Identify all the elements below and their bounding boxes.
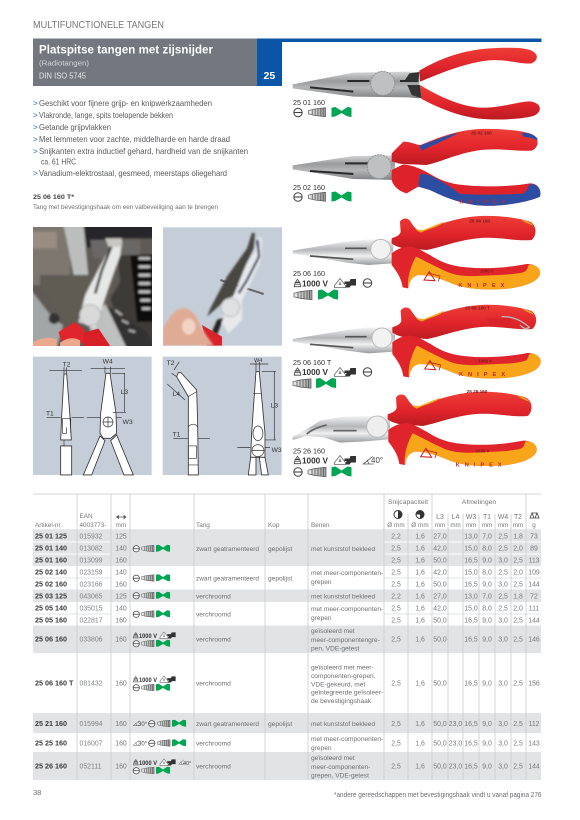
table rows: article, EAN, length and numeric values: 2,5 xyxy=(513,582,523,588)
table header: mm xyxy=(498,522,508,529)
table rows: article, EAN, length and numeric values: 25 01 140 xyxy=(35,544,67,552)
table row shading xyxy=(33,530,541,780)
table rows: article, EAN, length and numeric values: 50,0 xyxy=(433,740,447,748)
table rows: article, EAN, length and numeric values: 1,6 xyxy=(415,594,425,600)
table text: Benen: geïsoleerd met xyxy=(311,755,355,762)
label and icons: 25 06 160 T: 25 06 160 T xyxy=(293,358,332,367)
table rows: article, EAN, length and numeric values: 25 02 160 xyxy=(35,580,67,588)
table rows: article, EAN, length and numeric values: 160 xyxy=(115,558,127,564)
plier: 25 02 160: KNIPEX xyxy=(459,199,510,205)
diagram: straight plier dimensions: W4 xyxy=(103,359,113,366)
table rows: article, EAN, length and numeric values: 2,5 xyxy=(391,636,401,644)
table rows: article, EAN, length and numeric values: 2,0 xyxy=(513,606,523,612)
diagram: straight plier dimensions xyxy=(33,357,152,475)
table text: Benen: geïsoleerd met xyxy=(311,628,355,635)
table rows: article, EAN, length and numeric values: 9,0 xyxy=(482,636,492,644)
table rows: article, EAN, length and numeric values: 72 xyxy=(530,594,538,600)
table icons column: 1000 V xyxy=(139,761,157,767)
table rows: article, EAN, length and numeric values: 143 xyxy=(528,740,540,748)
table rows: article, EAN, length and numeric values: 2,5 xyxy=(498,570,508,576)
table rows: article, EAN, length and numeric values: 022817 xyxy=(80,618,103,624)
table text: Benen: grepen, VDE-getest xyxy=(311,772,369,780)
table text: Tang: zwart geatramenteerd xyxy=(196,721,259,728)
table icons column: 30° xyxy=(138,742,148,748)
plier: 25 06 160: 25 06 160 xyxy=(469,219,490,224)
plier: 25 06 160 xyxy=(293,216,540,289)
table rows: article, EAN, length and numeric values: 023166 xyxy=(80,582,103,588)
table header: Artikel-nr. xyxy=(35,522,62,529)
table rows: article, EAN, length and numeric values: 160 xyxy=(115,582,127,588)
table header: W3 xyxy=(466,514,476,521)
title: Platspitse tangen met zijsnijder xyxy=(39,44,214,56)
table rows: article, EAN, length and numeric values: 111 xyxy=(529,606,539,612)
label and icons: 25 06 160 T xyxy=(293,358,372,388)
label and icons: 25 26 160: 25 26 160 xyxy=(293,446,325,456)
table rows: article, EAN, length and numeric values: 140 xyxy=(115,606,127,612)
table rows: article, EAN, length and numeric values: 1,6 xyxy=(415,558,425,564)
diagram: straight plier dimensions: L3 xyxy=(121,389,128,396)
photo: bent pliers holding wire xyxy=(163,227,282,346)
table rows: article, EAN, length and numeric values: 2,5 xyxy=(498,546,508,552)
table rows: article, EAN, length and numeric values: 9,0 xyxy=(482,558,492,564)
diagram: bent plier dimensions: L4 xyxy=(173,391,180,398)
feature list: Getande grijpvlakken xyxy=(39,123,111,132)
table text: Benen: met meer-componenten- xyxy=(311,736,383,743)
table rows: article, EAN, length and numeric values: 125 xyxy=(115,594,127,600)
table header: mm xyxy=(482,522,492,529)
table text: Tang: zwart geatramenteerd xyxy=(196,546,259,553)
table rows: article, EAN, length and numeric values: 16,5 xyxy=(464,764,478,770)
table rows: article, EAN, length and numeric values: 156 xyxy=(528,680,540,688)
feature list: ca. 61 HRC xyxy=(41,158,76,166)
table rows: article, EAN, length and numeric values: 23,0 xyxy=(449,764,462,770)
table rows: article, EAN, length and numeric values: 2,0 xyxy=(513,546,523,552)
table rows: article, EAN, length and numeric values: 50,0 xyxy=(433,636,447,644)
table rows: article, EAN, length and numeric values: 1,6 xyxy=(415,570,425,576)
table header: Benen xyxy=(311,522,330,529)
table text: Benen: meer-componenten- xyxy=(311,764,370,771)
table text: Benen: geïsoleerd met meer- xyxy=(311,664,374,672)
table text: Tang: verchroomd xyxy=(196,740,231,748)
feature list: Geschikt voor fijnere grijp- en knipwerkzaamheden xyxy=(39,99,212,108)
table header xyxy=(35,499,539,529)
table header: Afmetingen xyxy=(462,499,496,506)
table rows: article, EAN, length and numeric values: 16,5 xyxy=(464,618,478,624)
feature list: Vanadium-elektrostaal, gesmeed, meerstaps oliegehard xyxy=(39,169,227,178)
table rows: article, EAN, length and numeric values: 160 xyxy=(115,636,127,644)
table rows: article, EAN, length and numeric values: 89 xyxy=(530,546,538,552)
section heading: MULTIFUNCTIONELE TANGEN xyxy=(33,20,164,31)
table rows: article, EAN, length and numeric values: 1,8 xyxy=(513,534,523,540)
table rows: article, EAN, length and numeric values: 25 06 160 T xyxy=(35,678,74,688)
table text: Benen: met meer-componenten- xyxy=(311,606,383,613)
table header: T1 xyxy=(483,514,491,521)
table rows: article, EAN, length and numeric values: 16,5 xyxy=(464,582,478,588)
table header: Tang xyxy=(196,522,210,529)
table rows: article, EAN, length and numeric values: 3,0 xyxy=(498,582,508,588)
table rows: article, EAN, length and numeric values: 9,0 xyxy=(482,582,492,588)
table rows: article, EAN, length and numeric values: 16,5 xyxy=(464,680,478,688)
diagram: bent plier dimensions xyxy=(163,357,282,475)
table text: Benen: componenten-grepen, xyxy=(311,673,376,680)
table rows: article, EAN, length and numeric values: 043065 xyxy=(80,594,103,600)
table rows: article, EAN, length and numeric values: 50,0 xyxy=(433,618,447,624)
table text: Benen: met kunststof bekleed xyxy=(311,721,375,728)
table rows: article, EAN, length and numeric values: 9,0 xyxy=(482,618,492,624)
table rows: article, EAN, length and numeric values: 160 xyxy=(115,680,127,688)
table rows: article, EAN, length and numeric values: 081432 xyxy=(80,680,103,688)
table rows: article, EAN, length and numeric values: 146 xyxy=(528,636,540,644)
table rows: article, EAN, length and numeric values: 3,0 xyxy=(498,618,508,624)
plier: 25 26 160 xyxy=(293,389,537,469)
feature list: Vlakronde, lange, spits toelopende bekken xyxy=(39,111,173,120)
diagram: straight plier dimensions: T2 xyxy=(63,362,71,369)
table rows: article, EAN, length and numeric values: 9,0 xyxy=(482,764,492,770)
table rows: article, EAN, length and numeric values: 9,0 xyxy=(482,721,492,728)
table rows: article, EAN, length and numeric values: 1,6 xyxy=(415,618,425,624)
table rows: article, EAN, length and numeric values: 1,8 xyxy=(513,594,523,600)
plier: 25 02 160 xyxy=(293,129,540,206)
photo: pliers on brake xyxy=(33,227,152,346)
table rows: article, EAN, length and numeric values: 2,5 xyxy=(513,740,523,748)
plier: 25 06 160 T xyxy=(293,305,541,378)
plier: 25 06 160 T: 1000 V xyxy=(478,358,492,363)
table text: Kop: gepolijst xyxy=(268,546,292,553)
plier: 25 01 160 xyxy=(293,48,540,119)
table rows: article, EAN, length and numeric values: 160 xyxy=(115,740,127,748)
table rows: article, EAN, length and numeric values: 2,5 xyxy=(513,618,523,624)
table rows: article, EAN, length and numeric values: 50,0 xyxy=(433,582,447,588)
note xyxy=(33,194,218,211)
label and icons: 25 06 160 T: 1000 V xyxy=(302,367,328,377)
table text: Benen: geïntegreerde geïsoleer- xyxy=(311,690,383,696)
table rows: article, EAN, length and numeric values: 25 03 125 xyxy=(35,592,67,600)
feature list: > xyxy=(33,135,38,144)
table rows: article, EAN, length and numeric values: 7,0 xyxy=(482,594,492,600)
table rows: article, EAN, length and numeric values: 2,5 xyxy=(391,546,401,552)
table icons column xyxy=(133,545,191,774)
table icons column: 40° xyxy=(183,761,191,767)
table rows: article, EAN, length and numeric values: 144 xyxy=(528,582,540,588)
table rows: article, EAN, length and numeric values: 3,0 xyxy=(498,764,508,770)
table rows: article, EAN, length and numeric values: 013082 xyxy=(80,546,103,552)
table rows: article, EAN, length and numeric values: 015994 xyxy=(80,721,103,728)
label and icons: 25 01 160: 25 01 160 xyxy=(293,98,325,107)
table rows: article, EAN, length and numeric values: 25 02 140 xyxy=(35,568,67,576)
table rows: article, EAN, length and numeric values: 033806 xyxy=(80,636,103,644)
table rows: article, EAN, length and numeric values: 25 21 160 xyxy=(35,719,67,728)
table rows: article, EAN, length and numeric values: 3,0 xyxy=(498,721,508,728)
feature list: Met lemmeten voor zachte, middelharde en harde draad xyxy=(39,135,230,144)
table rows: article, EAN, length and numeric values: 16,5 xyxy=(464,740,478,748)
label and icons: 25 26 160 xyxy=(293,446,383,477)
table icons column: 30° xyxy=(138,722,148,728)
table rows: article, EAN, length and numeric values: 023159 xyxy=(80,570,103,576)
table header: mm xyxy=(513,522,523,529)
table icons column: 1000 V xyxy=(139,678,157,684)
table rows: article, EAN, length and numeric values: 2,2 xyxy=(391,594,401,600)
feature list: Snijkanten extra inductief gehard, hardheid van de snijkanten xyxy=(39,147,248,156)
table header: g xyxy=(532,522,536,529)
table rows: article, EAN, length and numeric values: 16,5 xyxy=(464,636,478,644)
table text: Tang: verchroomd xyxy=(196,612,231,618)
table rows: article, EAN, length and numeric values: 013099 xyxy=(80,558,103,564)
table header: Ø mm xyxy=(387,522,405,529)
label and icons: 25 06 160: 1000 V xyxy=(302,278,328,288)
table rows: article, EAN, length and numeric values: 140 xyxy=(115,570,127,576)
plier: 25 06 160 T: 25 06 160 T xyxy=(465,305,490,310)
table rows: article, EAN, length and numeric values: 7,0 xyxy=(482,534,492,540)
table rows: article, EAN, length and numeric values: 160 xyxy=(115,764,127,770)
table rows: article, EAN, length and numeric values: 1,6 xyxy=(415,721,425,728)
feature list: > xyxy=(33,169,38,178)
feature list: > xyxy=(33,147,38,156)
label and icons: 25 26 160: 1000 V xyxy=(302,456,328,466)
table text: Benen: grepen xyxy=(311,745,332,752)
table text: Tang xyxy=(196,546,259,770)
table rows: article, EAN, length and numeric values: 2,5 xyxy=(513,558,523,564)
table header: 4003773- xyxy=(80,522,107,529)
table rows: article, EAN, length and numeric values: 1,6 xyxy=(415,764,425,770)
feature list: > xyxy=(33,123,38,132)
table rows: article, EAN, length and numeric values: 2,5 xyxy=(391,570,401,576)
table header: mm xyxy=(116,522,126,529)
table rows: article, EAN, length and numeric values: 8,0 xyxy=(482,546,492,552)
table rows: article, EAN, length and numeric values: 2,5 xyxy=(391,582,401,588)
table header: L4 xyxy=(452,514,459,521)
table rows: article, EAN, length and numeric values: 2,5 xyxy=(391,618,401,624)
plier: 25 06 160: 1000 V xyxy=(480,269,494,274)
table rows: article, EAN, length and numeric values: 8,0 xyxy=(482,570,492,576)
table rows: article, EAN, length and numeric values: 109 xyxy=(528,570,540,576)
table rows: article, EAN, length and numeric values: 42,0 xyxy=(433,546,447,552)
standard: DIN ISO 5745 xyxy=(39,72,87,80)
table rows: article, EAN, length and numeric values: 1,6 xyxy=(415,534,425,540)
table rows: article, EAN, length and numeric values: 27,0 xyxy=(433,594,447,600)
table rows: article, EAN, length and numeric values: 2,5 xyxy=(498,534,508,540)
table text: Kop: gepolijst xyxy=(268,576,292,582)
table rows: article, EAN, length and numeric values: 3,0 xyxy=(498,740,508,748)
table rows: article, EAN, length and numeric values: 25 01 125 xyxy=(35,532,67,540)
table header: T2 xyxy=(514,514,522,521)
table rows: article, EAN, length and numeric values: 2,0 xyxy=(513,570,523,576)
table text: Kop xyxy=(268,546,292,728)
table text: Benen: grepen xyxy=(311,615,332,622)
table rows: article, EAN, length and numeric values: 23,0 xyxy=(449,740,462,748)
feature list: > xyxy=(33,99,38,108)
table header: Snijcapaciteit xyxy=(388,499,428,506)
table header: mm xyxy=(466,522,476,529)
plier: 25 02 160: 25 02 160 xyxy=(471,131,492,136)
table rows: article, EAN, length and numeric values: 2,5 xyxy=(391,680,401,688)
table text: Tang: verchroomd xyxy=(196,764,231,770)
table rows: article, EAN, length and numeric values: 42,0 xyxy=(433,606,447,612)
diagram: bent plier dimensions: T1 xyxy=(173,432,181,439)
table rows: article, EAN, length and numeric values: 25 05 140 xyxy=(35,604,67,612)
table rows: article, EAN, length and numeric values: 1,6 xyxy=(415,582,425,588)
note: 25 06 160 T* xyxy=(33,194,74,201)
note: Tang met bevestigingshaak om een valbeveiliging aan te brengen xyxy=(33,205,218,211)
table rows: article, EAN, length and numeric values: 144 xyxy=(528,618,540,624)
table rows: article, EAN, length and numeric values: 13,0 xyxy=(464,594,478,600)
table header: mm xyxy=(435,522,445,529)
label and icons: 25 06 160 xyxy=(293,269,372,300)
table rows: article, EAN, length and numeric values: 50,0 xyxy=(433,764,447,770)
table rows: article, EAN, length and numeric values: 50,0 xyxy=(433,680,447,688)
plier: 25 06 160: KNIPEX xyxy=(458,283,509,289)
table rows: article, EAN, length and numeric values: 140 xyxy=(115,546,127,552)
table text: Benen: met meer-componenten- xyxy=(311,570,383,577)
group number: 25 xyxy=(264,70,275,82)
table rows: article, EAN, length and numeric values: 2,2 xyxy=(391,534,401,540)
diagram: bent plier dimensions: W4 xyxy=(254,358,262,364)
table rows: article, EAN, length and numeric values xyxy=(35,532,540,770)
diagram: straight plier dimensions: T1 xyxy=(46,410,54,417)
table rows: article, EAN, length and numeric values: 2,5 xyxy=(391,764,401,770)
table text: Benen: VDE-gekeurd, met xyxy=(311,682,365,688)
table xyxy=(33,494,541,780)
label and icons: 25 02 160 xyxy=(293,183,352,202)
table rows: article, EAN, length and numeric values: 3,0 xyxy=(498,558,508,564)
label and icons: 25 26 160: 40° xyxy=(371,456,383,465)
table rows: article, EAN, length and numeric values: 112 xyxy=(528,721,540,728)
table text: Benen: de bevestigingshaak xyxy=(311,698,372,705)
table rows: article, EAN, length and numeric values: 15,0 xyxy=(464,570,478,576)
table rows: article, EAN, length and numeric values: 25 25 160 xyxy=(35,738,67,748)
diagram: bent plier dimensions: L3 xyxy=(271,402,278,409)
table rows: article, EAN, length and numeric values: 25 26 160 xyxy=(35,762,67,770)
table rows: article, EAN, length and numeric values: 2,5 xyxy=(513,721,523,728)
table rows: article, EAN, length and numeric values: 160 xyxy=(115,618,127,624)
table rows: article, EAN, length and numeric values: 015932 xyxy=(80,534,103,540)
table text: Tang: zwart geatramenteerd xyxy=(196,576,259,582)
table header: mm xyxy=(450,522,461,529)
table rows: article, EAN, length and numeric values: 035015 xyxy=(80,606,103,612)
table text: Benen: pen, VDE-getest xyxy=(311,646,360,652)
label and icons: 25 06 160: 25 06 160 xyxy=(293,269,325,278)
table rows: article, EAN, length and numeric values: 2,5 xyxy=(513,680,523,688)
footnote: *andere gereedschappen met bevestigingshaak vindt u vanaf pagina 276 xyxy=(334,792,542,799)
table rows: article, EAN, length and numeric values: 42,0 xyxy=(433,570,447,576)
table rows: article, EAN, length and numeric values: 13,0 xyxy=(464,534,478,540)
table rows: article, EAN, length and numeric values: 50,0 xyxy=(433,558,447,564)
table icons column: 1000 V xyxy=(139,634,157,640)
table rows: article, EAN, length and numeric values: 2,5 xyxy=(498,606,508,612)
table rows: article, EAN, length and numeric values: 9,0 xyxy=(482,680,492,688)
table rows: article, EAN, length and numeric values: 2,5 xyxy=(391,606,401,612)
table header: EAN xyxy=(80,513,93,520)
table rows: article, EAN, length and numeric values: 2,5 xyxy=(391,740,401,748)
table rows: article, EAN, length and numeric values: 113 xyxy=(528,558,540,564)
subtitle: (Radiotangen) xyxy=(39,58,89,68)
table rows: article, EAN, length and numeric values: 1,6 xyxy=(415,680,425,688)
diagram: bent plier dimensions: W3 xyxy=(272,447,282,454)
header band xyxy=(33,38,542,86)
table header: Ø mm xyxy=(411,522,429,529)
plier: 25 06 160 T: KNIPEX xyxy=(459,372,510,378)
table rows: article, EAN, length and numeric values: 2,5 xyxy=(498,594,508,600)
plier: 25 26 160: 1000 V xyxy=(476,449,489,454)
table text: Benen: meer-componentengre- xyxy=(311,637,380,644)
table rows: article, EAN, length and numeric values: 052111 xyxy=(80,764,102,770)
table rows: article, EAN, length and numeric values: 160 xyxy=(115,721,127,728)
table text: Benen xyxy=(311,546,383,780)
table rows: article, EAN, length and numeric values: 3,0 xyxy=(498,680,508,688)
table rows: article, EAN, length and numeric values: 144 xyxy=(528,764,540,770)
table text: Tang: verchroomd xyxy=(196,680,231,688)
table rows: article, EAN, length and numeric values: 15,0 xyxy=(464,606,478,612)
table rows: article, EAN, length and numeric values: 9,0 xyxy=(482,740,492,748)
table rows: article, EAN, length and numeric values: 73 xyxy=(530,534,538,540)
table header: Kop xyxy=(268,522,280,529)
table rows: article, EAN, length and numeric values: 8,0 xyxy=(482,606,492,612)
table text: Benen: met kunststof bekleed xyxy=(311,546,375,553)
table rows: article, EAN, length and numeric values: 1,6 xyxy=(415,606,425,612)
table rows: article, EAN, length and numeric values: 25 05 160 xyxy=(35,616,67,624)
table rows: article, EAN, length and numeric values: 3,0 xyxy=(498,636,508,644)
table text: Kop: gepolijst xyxy=(268,721,292,728)
page number: 38 xyxy=(33,788,41,797)
label and icons: 25 02 160: 25 02 160 xyxy=(293,183,325,192)
table text: Benen: grepen xyxy=(311,579,332,586)
diagram: bent plier dimensions: T2 xyxy=(167,360,175,367)
plier: 25 26 160: 25 26 160 xyxy=(467,389,488,394)
table rows: article, EAN, length and numeric values: 016007 xyxy=(80,740,103,748)
label and icons: 25 01 160 xyxy=(293,98,352,117)
table rows: article, EAN, length and numeric values: 25 01 160 xyxy=(35,556,67,564)
table rows: article, EAN, length and numeric values: 15,0 xyxy=(464,546,478,552)
diagram: straight plier dimensions: W3 xyxy=(123,419,133,426)
table rows: article, EAN, length and numeric values: 16,5 xyxy=(464,721,478,728)
table text: Benen: met kunststof bekleed xyxy=(311,594,375,600)
table header: L3 xyxy=(436,514,444,521)
table rows: article, EAN, length and numeric values: 2,5 xyxy=(513,636,523,644)
table rows: article, EAN, length and numeric values: 2,5 xyxy=(513,764,523,770)
table rows: article, EAN, length and numeric values: 1,6 xyxy=(415,636,425,644)
table rows: article, EAN, length and numeric values: 16,5 xyxy=(464,558,478,564)
table text: Tang: verchroomd xyxy=(196,636,231,644)
table rows: article, EAN, length and numeric values: 2,5 xyxy=(391,721,401,728)
table rows: article, EAN, length and numeric values: 23,0 xyxy=(449,721,462,728)
table rows: article, EAN, length and numeric values: 25 06 160 xyxy=(35,634,67,644)
table header: W4 xyxy=(498,514,508,521)
feature list: > xyxy=(33,111,38,120)
table rows: article, EAN, length and numeric values: 1,6 xyxy=(415,546,425,552)
table rows: article, EAN, length and numeric values: 50,0 xyxy=(433,721,447,728)
table rows: article, EAN, length and numeric values: 125 xyxy=(115,534,127,540)
feature list xyxy=(33,99,248,178)
plier: 25 26 160: KNIPEX xyxy=(456,463,507,469)
table text: Tang: verchroomd xyxy=(196,594,231,600)
table rows: article, EAN, length and numeric values: 27,0 xyxy=(433,534,447,540)
table rows: article, EAN, length and numeric values: 2,5 xyxy=(391,558,401,564)
table rows: article, EAN, length and numeric values: 1,6 xyxy=(415,740,425,748)
